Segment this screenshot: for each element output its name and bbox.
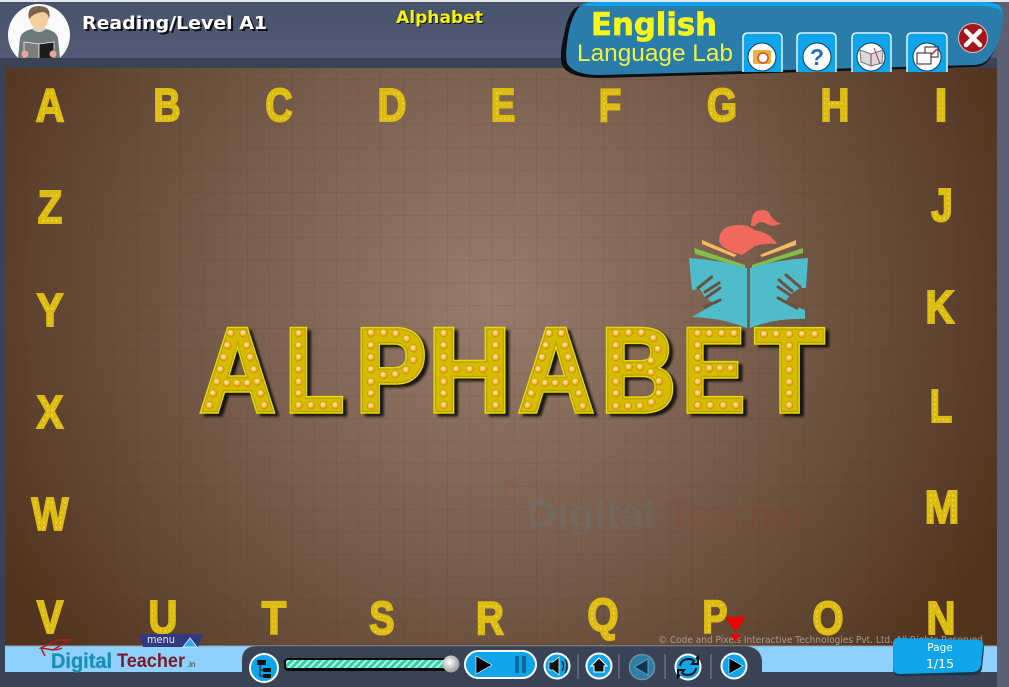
drop shadow: L: [289, 307, 348, 441]
alphabet ring letters: F: [599, 79, 621, 131]
alphabet ring letters: T: [262, 593, 286, 645]
heading: topic: Alphabet: [396, 8, 483, 28]
heading: topic: Alphabet: [397, 9, 484, 29]
alphabet ring letters: I: [935, 79, 947, 131]
drop shadow: [203, 306, 828, 441]
alphabet ring letters: L: [930, 380, 952, 432]
icon: back button: [630, 654, 654, 680]
alphabet ring letters: [32, 79, 959, 645]
drop shadow: P: [359, 307, 431, 441]
logo: Digital Teacher: Digital: [51, 650, 112, 673]
letter faces: A: [199, 303, 276, 437]
heading: level: Reading/Level A1: [84, 16, 269, 36]
letter faces: [199, 303, 824, 438]
drop shadow: E: [686, 306, 749, 440]
alphabet ring letters: V: [37, 592, 64, 644]
watermark: Digital Teacher: [503, 468, 806, 536]
alphabet ring letters: Z: [38, 182, 62, 234]
heading: level: Reading/Level A1: [82, 14, 267, 34]
letter rims: A: [199, 303, 276, 437]
icon: help tab: ?: [810, 44, 824, 70]
letter faces: E: [682, 303, 745, 437]
drop shadow: A: [203, 306, 280, 440]
title: ALPHABET marquee lettering: [199, 303, 828, 441]
icon: help tab: [797, 33, 836, 72]
drop shadow: H: [432, 306, 515, 440]
drop shadow: B: [605, 306, 680, 440]
alphabet ring letters: O: [812, 593, 844, 645]
page number: 1/15: [926, 656, 954, 671]
icon: folder clock tab: [743, 33, 782, 72]
red triangle markers: [725, 617, 746, 642]
copyright notice: © Code and Pixels Interactive Technologies Pvt. Ltd. All Rights Reserved: [658, 635, 983, 646]
alphabet ring letters: J: [931, 180, 953, 232]
logo: Digital Teacher: .in: [187, 660, 195, 669]
letter rims: B: [601, 303, 676, 437]
alphabet ring letters: A: [36, 80, 64, 132]
letter faces: T: [755, 303, 824, 437]
alphabet ring letters: B: [153, 79, 181, 131]
icon: open book tab: [852, 33, 891, 72]
letter faces: H: [428, 303, 511, 437]
alphabet ring letters: U: [149, 592, 177, 644]
watermark: Digital Teacher: Digital: [527, 494, 655, 536]
icon: refresh button: [676, 654, 700, 680]
menu tab: menu: [147, 634, 175, 646]
alphabet ring letters: W: [32, 489, 69, 541]
bulbs: [206, 329, 818, 410]
letter faces: A: [518, 303, 594, 437]
watermark: Digital Teacher: Teacher: [668, 494, 806, 536]
page label: Page: [927, 642, 953, 654]
alphabet ring letters: P: [702, 591, 728, 643]
alphabet ring letters: R: [476, 593, 504, 644]
icon: tree menu button: [250, 654, 278, 682]
alphabet ring letters: M: [925, 482, 959, 534]
icon: next button: [722, 654, 746, 678]
alphabet ring letters: X: [37, 387, 64, 439]
progress bar: [284, 656, 460, 672]
alphabet ring letters: S: [369, 592, 395, 644]
letter rims: H: [428, 303, 511, 437]
alphabet ring letters: N: [927, 593, 955, 645]
play and pause control: [465, 651, 536, 678]
alphabet ring letters: D: [378, 80, 406, 132]
panel: English Language Lab toolbar: [561, 2, 1003, 78]
page counter badge: [893, 638, 984, 676]
title: English: English: [591, 7, 717, 43]
letter rims: [199, 303, 824, 438]
letter rims: L: [285, 304, 344, 438]
avatar: reading man: [8, 4, 70, 58]
letter rims: E: [682, 303, 745, 437]
letter rims: A: [518, 303, 594, 437]
letter rims: T: [755, 303, 824, 437]
alphabet ring letters: H: [821, 80, 849, 132]
logo: Digital Teacher: [41, 640, 195, 673]
letter faces: P: [355, 304, 427, 438]
icon: close button: [958, 24, 988, 52]
drop shadow: A: [522, 306, 598, 440]
letter rims: P: [355, 304, 427, 438]
alphabet ring letters: Q: [587, 590, 619, 642]
icon: girl reading book: [689, 210, 808, 328]
menu tab: [139, 634, 203, 647]
subtitle: Language Lab: Language Lab: [577, 40, 733, 67]
icon: home button: [586, 654, 612, 678]
icon: window resize tab: [907, 33, 947, 72]
letter faces: L: [285, 304, 344, 438]
footer light blue bar: [5, 645, 997, 672]
logo: Digital Teacher: Teacher: [117, 651, 186, 672]
alphabet ring letters: G: [707, 80, 737, 131]
control bar panel: [242, 646, 762, 687]
drop shadow: T: [759, 306, 828, 440]
alphabet ring letters: C: [265, 79, 293, 131]
alphabet ring letters: E: [491, 79, 515, 131]
alphabet ring letters: K: [926, 282, 954, 334]
alphabet ring letters: Y: [37, 285, 64, 337]
icon: sound button: [544, 654, 570, 678]
letter faces: B: [601, 303, 676, 437]
